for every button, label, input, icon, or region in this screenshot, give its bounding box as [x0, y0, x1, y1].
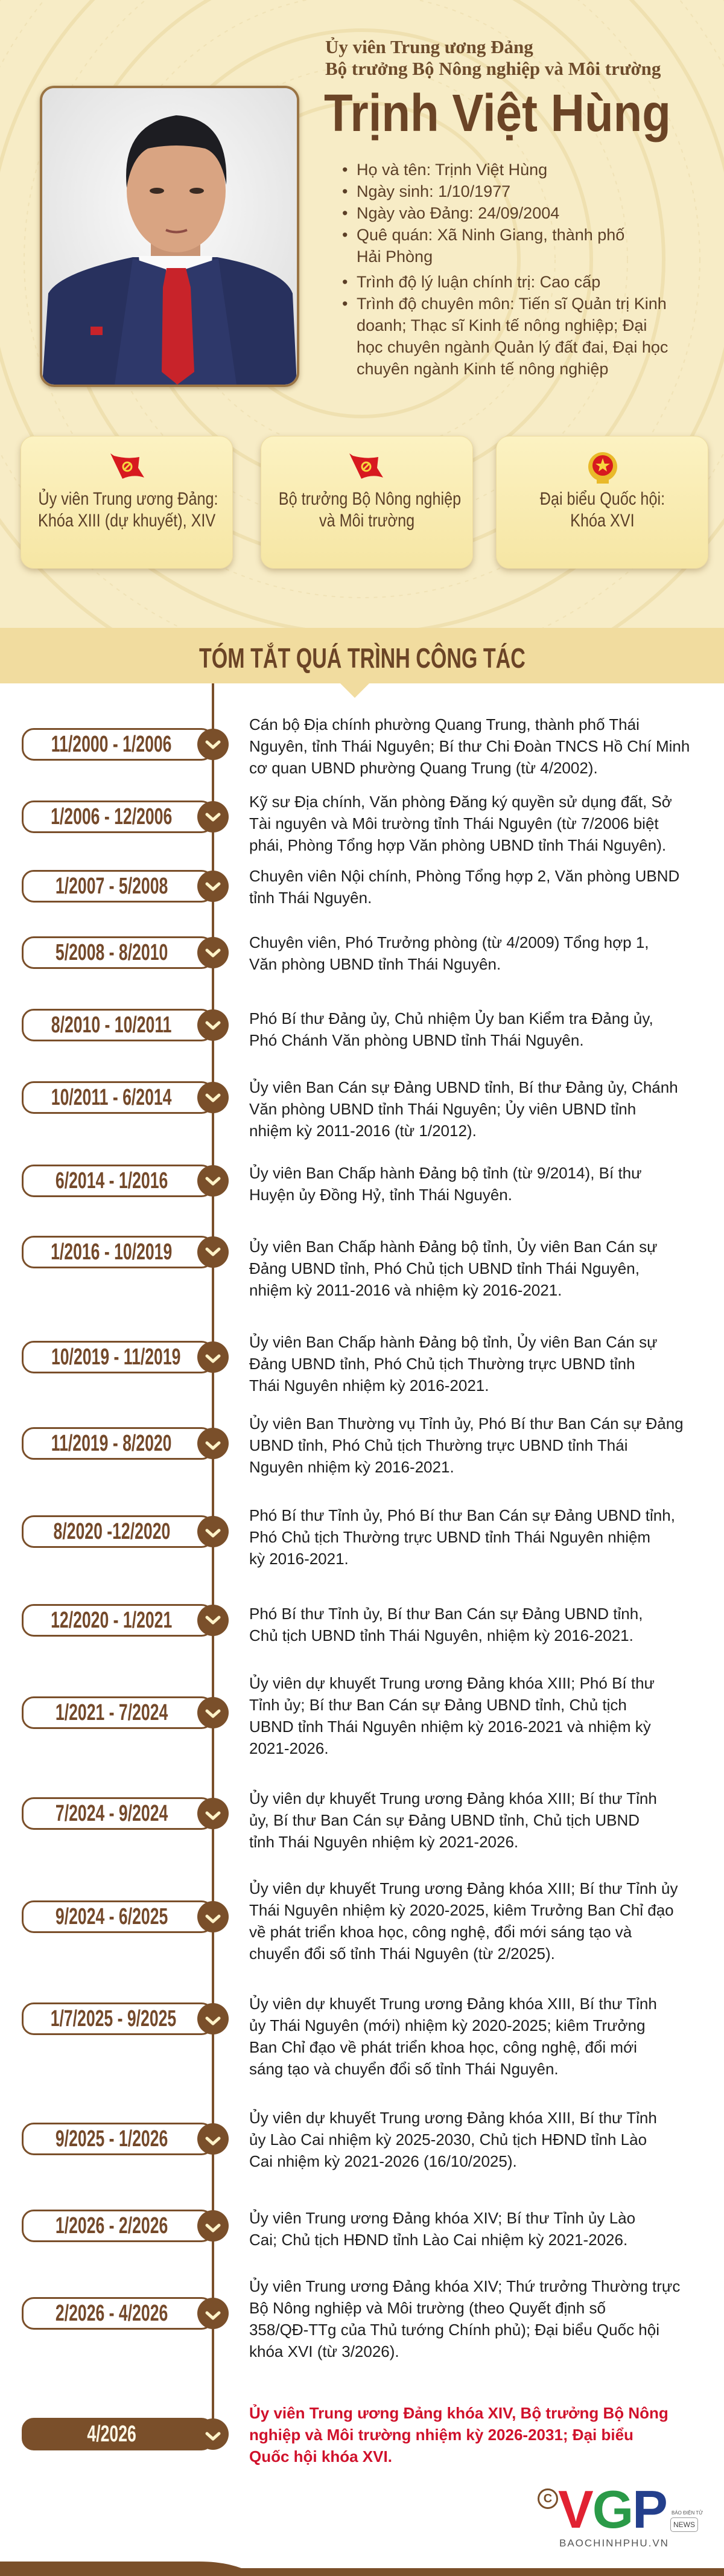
item 16: Ban Chỉ đạo về phát triển khoa học, công nghệ, đổi mới: [249, 2038, 637, 2056]
item 16: 1/7/2025 - 9/2025: [51, 2006, 176, 2031]
item 12: Chủ tịch UBND tỉnh Thái Nguyên, nhiệm kỳ 2016-2021.: [249, 1626, 634, 1644]
item 17: ủy Lào Cai nhiệm kỳ 2025-2030, Chủ tịch HĐND tỉnh Lào: [249, 2130, 647, 2149]
item 9: [22, 1333, 657, 1395]
item 12: 12/2020 - 1/2021: [51, 1608, 173, 1633]
item 17: 9/2025 - 1/2026: [56, 2126, 168, 2152]
item 10: 11/2019 - 8/2020: [51, 1431, 172, 1456]
card: party central committee: [21, 436, 233, 569]
item 20: current: Quốc hội khóa XVI.: [249, 2447, 392, 2466]
item 14: ủy, Bí thư Ban Cán sự Đảng UBND tỉnh, Chủ tịch UBND: [249, 1811, 640, 1829]
portrait photo: [40, 86, 299, 387]
bio bullet list: Ngày vào Đảng: 24/09/2004: [357, 204, 559, 222]
item 4: 5/2008 - 8/2010: [56, 940, 168, 965]
item 8: nhiệm kỳ 2011-2016 và nhiệm kỳ 2016-2021.: [249, 1281, 562, 1299]
item 15: Ủy viên dự khuyết Trung ương Đảng khóa XIII; Bí thư Tỉnh ủy: [249, 1879, 678, 1897]
item 13: 1/2021 - 7/2024: [56, 1700, 168, 1725]
item 9: Đảng UBND tỉnh, Phó Chủ tịch Thường trực UBND tỉnh: [249, 1355, 635, 1373]
item 14: Ủy viên dự khuyết Trung ương Đảng khóa XIII; Bí thư Tỉnh: [249, 1789, 657, 1807]
item 19: Bộ Nông nghiệp và Môi trường (theo Quyết định số: [249, 2299, 606, 2317]
item 19: 2/2026 - 4/2026: [56, 2301, 168, 2326]
card: party central committee: Ủy viên Trung ương Đảng:: [38, 489, 218, 509]
item 14: 7/2024 - 9/2024: [56, 1801, 168, 1826]
icon: national emblem: [588, 452, 617, 484]
item 11: Phó Chủ tịch Thường trực UBND tỉnh Thái Nguyên nhiệm: [249, 1528, 650, 1546]
bio bullet list: Họ và tên: Trịnh Việt Hùng: [357, 161, 547, 179]
item 18: [22, 2209, 635, 2249]
item 20: current: 4/2026: [87, 2421, 136, 2447]
item 12: Phó Bí thư Tỉnh ủy, Bí thư Ban Cán sự Đảng UBND tỉnh,: [249, 1605, 643, 1623]
title: positions: Bộ trưởng Bộ Nông nghiệp và Môi trường: [325, 58, 661, 79]
item 1: 11/2000 - 1/2006: [51, 732, 172, 757]
item 4: [22, 933, 649, 973]
item 13: Ủy viên dự khuyết Trung ương Đảng khóa XIII; Phó Bí thư: [249, 1674, 655, 1692]
item 9: 10/2019 - 11/2019: [51, 1344, 180, 1370]
item 15: chuyển đổi số tỉnh Thái Nguyên (từ 2/2025).: [249, 1945, 555, 1963]
item 15: Thái Nguyên nhiệm kỳ 2020-2025, kiêm Trưởng Ban Chỉ đạo: [249, 1901, 674, 1919]
logo: VGP: VGP: [558, 2479, 667, 2539]
item 20: current: [22, 2404, 668, 2466]
item 1: Nguyên, tỉnh Thái Nguyên; Bí thư Chi Đoàn TNCS Hồ Chí Minh: [249, 737, 690, 755]
item 5: 8/2010 - 10/2011: [51, 1012, 172, 1038]
item 1: cơ quan UBND phường Quang Trung (từ 4/2002).: [249, 759, 598, 777]
logo: VGP: C: [544, 2492, 552, 2505]
bio bullet list: Trình độ chuyên môn: Tiến sĩ Quản trị Kinh: [357, 295, 667, 313]
item 3: 1/2007 - 5/2008: [56, 874, 168, 899]
item 11: [22, 1506, 675, 1568]
item 5: [22, 1009, 653, 1049]
item 17: [22, 2109, 657, 2170]
icon: party flag: [110, 453, 144, 479]
item 17: Cai nhiệm kỳ 2021-2026 (16/10/2025).: [249, 2152, 517, 2170]
item 8: 1/2016 - 10/2019: [51, 1239, 173, 1265]
heading: name: Trịnh Việt Hùng: [324, 83, 671, 142]
item 16: sáng tạo và chuyển đổi số tỉnh Thái Nguyên.: [249, 2060, 559, 2078]
item 2: phái, Phòng Tổng hợp Văn phòng UBND tỉnh Thái Nguyên).: [249, 836, 666, 854]
item 11: 8/2020 -12/2020: [53, 1519, 170, 1544]
item 10: Ủy viên Ban Thường vụ Tỉnh ủy, Phó Bí thư Ban Cán sự Đảng: [249, 1414, 684, 1433]
item 18: Ủy viên Trung ương Đảng khóa XIV; Bí thư Tỉnh ủy Lào: [249, 2209, 635, 2227]
item 18: Cai; Chủ tịch HĐND tỉnh Lào Cai nhiệm kỳ 2021-2026.: [249, 2231, 627, 2249]
item 6: nhiệm kỳ 2011-2016 (từ 1/2012).: [249, 1122, 477, 1140]
bio bullet list: chuyên ngành Kinh tế nông nghiệp: [357, 360, 608, 378]
logo: VGP: [538, 2479, 703, 2549]
section header band: [0, 628, 724, 683]
item 9: Ủy viên Ban Chấp hành Đảng bộ tỉnh, Ủy viên Ban Cán sự: [249, 1333, 657, 1351]
item 13: UBND tỉnh Thái Nguyên nhiệm kỳ 2016-2021 và nhiệm kỳ: [249, 1718, 651, 1736]
item 2: Tài nguyên và Môi trường tỉnh Thái Nguyên (từ 7/2006 biệt: [249, 814, 659, 833]
item 10: UBND tỉnh, Phó Chủ tịch Thường trực UBND tỉnh Thái: [249, 1436, 627, 1454]
item 3: [22, 867, 679, 907]
item 7: [22, 1164, 642, 1204]
item 5: Phó Chánh Văn phòng UBND tỉnh Thái Nguyên.: [249, 1031, 584, 1049]
item 2: [22, 793, 672, 854]
item 14: tỉnh Thái Nguyên nhiệm kỳ 2021-2026.: [249, 1833, 518, 1851]
bio bullet list: Hải Phòng: [357, 248, 433, 266]
item 8: [22, 1236, 657, 1299]
arrow: band pointer: [340, 683, 369, 698]
title: positions: Ủy viên Trung ương Đảng: [325, 36, 533, 57]
item 15: [22, 1879, 678, 1963]
item 19: Ủy viên Trung ương Đảng khóa XIV; Thứ trưởng Thường trực: [249, 2277, 680, 2295]
item 7: Huyện ủy Đồng Hỷ, tỉnh Thái Nguyên.: [249, 1186, 512, 1204]
item 20: current: nghiệp và Môi trường nhiệm kỳ 2026-2031; Đại biểu: [249, 2426, 634, 2444]
bio bullet list: Quê quán: Xã Ninh Giang, thành phố: [357, 226, 624, 244]
item 13: 2021-2026.: [249, 1739, 329, 1757]
item 6: Ủy viên Ban Cán sự Đảng UBND tỉnh, Bí thư Đảng ủy, Chánh: [249, 1078, 678, 1096]
item 12: [22, 1604, 643, 1644]
item 18: 1/2026 - 2/2026: [56, 2213, 168, 2239]
bio bullet list: học chuyên ngành Quản lý đất đai, Đại học: [357, 338, 668, 356]
item 9: Thái Nguyên nhiệm kỳ 2016-2021.: [249, 1376, 489, 1395]
item 5: Phó Bí thư Đảng ủy, Chủ nhiệm Ủy ban Kiểm tra Đảng ủy,: [249, 1009, 653, 1028]
item 17: Ủy viên dự khuyết Trung ương Đảng khóa XIII, Bí thư Tỉnh: [249, 2109, 657, 2127]
card: minister: Bộ trưởng Bộ Nông nghiệp: [279, 489, 461, 509]
item 15: 9/2024 - 6/2025: [56, 1904, 168, 1929]
item 15: về phát triển khoa học, công nghệ, đổi mới sáng tạo và: [249, 1923, 632, 1941]
item 3: tỉnh Thái Nguyên.: [249, 889, 372, 907]
logo: VGP: BÁO ĐIỆN TỬ: [672, 2510, 703, 2516]
item 13: Tỉnh ủy; Bí thư Ban Cán sự Đảng UBND tỉnh, Chủ tịch: [249, 1696, 627, 1714]
item 14: [22, 1789, 657, 1851]
item 19: 358/QĐ-TTg của Thủ tướng Chính phủ); Đại biểu Quốc hội: [249, 2321, 659, 2339]
bio bullet list: doanh; Thạc sĩ Kinh tế nông nghiệp; Đại: [357, 316, 647, 334]
bio bullet list: [343, 161, 668, 378]
bio bullet list: Trình độ lý luận chính trị: Cao cấp: [357, 273, 600, 291]
card: national assembly: [496, 436, 708, 569]
item 19: khóa XVI (từ 3/2026).: [249, 2342, 399, 2360]
title: positions: [325, 36, 661, 79]
top background with drum pattern: [0, 0, 724, 683]
card: national assembly: Khóa XVI: [570, 511, 634, 531]
item 4: Chuyên viên, Phó Trưởng phòng (từ 4/2009) Tổng hợp 1,: [249, 933, 649, 951]
item 6: [22, 1078, 678, 1140]
card: national assembly: Đại biểu Quốc hội:: [539, 489, 665, 509]
item 7: Ủy viên Ban Chấp hành Đảng bộ tỉnh (từ 9/2014), Bí thư: [249, 1164, 642, 1182]
card: minister: [261, 436, 473, 569]
heading: section title: TÓM TẮT QUÁ TRÌNH CÔNG TÁC: [199, 642, 525, 674]
item 4: Văn phòng UBND tỉnh Thái Nguyên.: [249, 955, 501, 973]
item 7: 6/2014 - 1/2016: [56, 1168, 168, 1194]
bio bullet list: Ngày sinh: 1/10/1977: [357, 182, 510, 200]
item 1: Cán bộ Địa chính phường Quang Trung, thành phố Thái: [249, 715, 640, 733]
item 10: Nguyên nhiệm kỳ 2016-2021.: [249, 1458, 454, 1476]
item 6: 10/2011 - 6/2014: [51, 1085, 172, 1110]
item 2: Kỹ sư Địa chính, Văn phòng Đăng ký quyền sử dụng đất, Sở: [249, 793, 672, 811]
item 6: Văn phòng UBND tỉnh Thái Nguyên; Ủy viên UBND tỉnh: [249, 1100, 636, 1118]
item 1: [22, 715, 690, 777]
item 16: ủy Thái Nguyên (mới) nhiệm kỳ 2020-2025; kiêm Trưởng: [249, 2016, 646, 2034]
card: minister: và Môi trường: [319, 511, 414, 531]
item 19: [22, 2277, 680, 2360]
footer bar: [0, 2562, 724, 2576]
item 11: Phó Bí thư Tỉnh ủy, Phó Bí thư Ban Cán sự Đảng UBND tỉnh,: [249, 1506, 675, 1524]
item 11: kỳ 2016-2021.: [249, 1550, 349, 1568]
item 10: [22, 1414, 684, 1476]
item 8: Ủy viên Ban Chấp hành Đảng bộ tỉnh, Ủy viên Ban Cán sự: [249, 1238, 657, 1256]
icon: party flag: [349, 453, 383, 479]
item 16: [22, 1995, 657, 2078]
item 13: [22, 1674, 655, 1757]
card: party central committee: Khóa XIII (dự khuyết), XIV: [38, 511, 215, 531]
item 8: Đảng UBND tỉnh, Phó Chủ tịch UBND tỉnh Thái Nguyên,: [249, 1259, 640, 1277]
item 16: Ủy viên dự khuyết Trung ương Đảng khóa XIII, Bí thư Tỉnh: [249, 1995, 657, 2013]
item 3: Chuyên viên Nội chính, Phòng Tổng hợp 2, Văn phòng UBND: [249, 867, 679, 885]
logo: VGP: BAOCHINHPHU.VN: [559, 2537, 669, 2549]
item 20: current: Ủy viên Trung ương Đảng khóa XIV, Bộ trưởng Bộ Nông: [249, 2404, 668, 2422]
logo: VGP: NEWS: [673, 2520, 695, 2529]
item 2: 1/2006 - 12/2006: [51, 804, 173, 829]
timeline vertical line: [212, 683, 214, 2422]
